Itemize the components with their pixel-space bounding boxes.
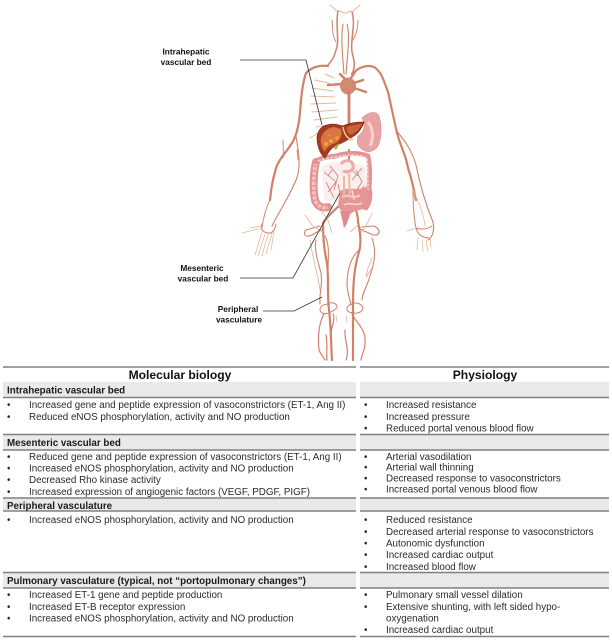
section: intrahepatic, physiology: •: [364, 400, 368, 411]
section: peripheral, physiology: •: [364, 550, 368, 561]
section: mesenteric, physiology: Arterial vasodilation: [386, 452, 472, 463]
section: peripheral, molecular biology: Increased eNOS phosphorylation, activity and NO production: [29, 515, 294, 526]
section: mesenteric, molecular biology: •: [7, 464, 11, 474]
label: mesenteric vascular bed: [178, 263, 228, 284]
section: peripheral, physiology: •: [364, 538, 368, 550]
label: peripheral vasculature: Peripheral: [218, 304, 258, 314]
section: peripheral, physiology: Decreased arterial response to vasoconstrictors: [386, 527, 594, 538]
section: pulmonary, physiology: •: [364, 602, 368, 613]
section: mesenteric, physiology: [364, 452, 561, 496]
section: mesenteric, physiology: •: [364, 452, 368, 463]
section: mesenteric, physiology: Increased portal venous blood flow: [386, 484, 538, 496]
section: mesenteric, molecular biology: •: [7, 475, 11, 486]
section: peripheral, physiology: Autonomic dysfunction: [386, 538, 485, 550]
vessels: left arm: [242, 66, 328, 256]
section: mesenteric, molecular biology: Increased expression of angiogenic factors (VEGF, PDGF, PIGF): [29, 487, 310, 498]
section: pulmonary, physiology: •: [364, 625, 368, 636]
section: pulmonary, molecular biology: •: [7, 602, 11, 613]
label: intrahepatic vascular bed: vascular bed: [161, 57, 211, 67]
column heading: physiology: Physiology: [453, 368, 518, 382]
section: peripheral, molecular biology: [7, 501, 294, 526]
section: pulmonary, physiology: Pulmonary small vessel dilation: [386, 590, 523, 601]
section: intrahepatic, molecular biology: Increased gene and peptide expression of vasoconstrictors (ET-1, Ang II): [29, 400, 345, 411]
label: peripheral vasculature: [216, 304, 262, 324]
section: intrahepatic, molecular biology: •: [7, 412, 11, 423]
section: peripheral, physiology: •: [364, 562, 368, 573]
table rules and section bands: [0, 366, 612, 640]
section: intrahepatic, molecular biology: Reduced eNOS phosphorylation, activity and NO production: [29, 412, 290, 423]
section: pulmonary, molecular biology: •: [7, 614, 11, 624]
section: intrahepatic, physiology: Increased resistance: [386, 400, 477, 411]
section: mesenteric, molecular biology: Increased eNOS phosphorylation, activity and NO production: [29, 464, 294, 474]
section: intrahepatic, physiology: Reduced portal venous blood flow: [386, 424, 535, 434]
organ: stomach: [357, 112, 381, 152]
section: intrahepatic, physiology: [364, 400, 535, 434]
section: intrahepatic, physiology: Increased pressure: [386, 412, 470, 423]
vessels: right arm: [352, 66, 434, 252]
section: peripheral, molecular biology: Peripheral vasculature: [7, 501, 113, 512]
section: intrahepatic, physiology: •: [364, 412, 368, 423]
section: pulmonary, physiology: oxygenation: [386, 614, 439, 624]
section: mesenteric, physiology: Decreased response to vasoconstrictors: [386, 474, 561, 484]
column heading: molecular biology: Molecular biology: [129, 368, 232, 382]
section: mesenteric, molecular biology: [7, 438, 342, 498]
section: peripheral, physiology: •: [364, 515, 368, 526]
section: peripheral, physiology: •: [364, 527, 368, 538]
section: pulmonary, molecular biology: •: [7, 590, 11, 601]
table: [0, 366, 612, 640]
label: mesenteric vascular bed: vascular bed: [178, 274, 228, 284]
section: mesenteric, physiology: •: [364, 474, 368, 484]
section: intrahepatic, molecular biology: [7, 386, 345, 423]
section: mesenteric, physiology: Arterial wall thinning: [386, 462, 474, 474]
section: peripheral, physiology: Increased blood flow: [386, 562, 477, 573]
section: pulmonary, molecular biology: Pulmonary vasculature (typical, not “portopulmonary changes”): [7, 576, 306, 587]
label: intrahepatic vascular bed: Intrahepatic: [162, 46, 210, 56]
vessels: heart and aorta: [328, 72, 366, 195]
leader line: mesenteric: [240, 193, 340, 278]
section: pulmonary, molecular biology: Increased eNOS phosphorylation, activity and NO production: [29, 614, 294, 624]
vessels: head and neck: [327, 5, 360, 74]
section: pulmonary, physiology: [364, 590, 560, 636]
label: peripheral vasculature: vasculature: [216, 314, 262, 324]
section: intrahepatic, molecular biology: Intrahepatic vascular bed: [7, 386, 125, 396]
section: peripheral, physiology: Reduced resistance: [386, 515, 473, 526]
section: mesenteric, molecular biology: •: [7, 452, 11, 463]
anatomical body illustration: [242, 5, 434, 360]
section: mesenteric, physiology: •: [364, 462, 368, 474]
section: pulmonary, molecular biology: [7, 576, 306, 624]
leader line: peripheral: [263, 297, 322, 311]
section: mesenteric, molecular biology: Mesenteric vascular bed: [7, 438, 121, 449]
section: mesenteric, physiology: •: [364, 484, 368, 496]
section: intrahepatic, molecular biology: •: [7, 400, 11, 411]
section: peripheral, molecular biology: •: [7, 515, 11, 526]
section: pulmonary, physiology: Extensive shunting, with left sided hypo-: [386, 602, 560, 613]
leader line: intrahepatic: [240, 60, 322, 125]
section: pulmonary, molecular biology: Increased ET-B receptor expression: [29, 602, 185, 613]
vessels: pelvis and legs: [304, 195, 379, 360]
vessels: ribs: [310, 74, 337, 138]
section: pulmonary, physiology: Increased cardiac output: [386, 625, 494, 636]
section: pulmonary, molecular biology: Increased ET-1 gene and peptide production: [29, 590, 222, 601]
section: pulmonary, physiology: •: [364, 590, 368, 601]
organ: small intestine and colon: [314, 153, 371, 228]
label: mesenteric vascular bed: Mesenteric: [180, 263, 224, 273]
section: mesenteric, molecular biology: Reduced gene and peptide expression of vasoconstrictors (ET-1, Ang II): [29, 452, 342, 463]
label: intrahepatic vascular bed: [161, 46, 211, 67]
section: peripheral, physiology: Increased cardiac output: [386, 550, 494, 561]
organ: liver: [317, 122, 364, 158]
section: intrahepatic, physiology: •: [364, 424, 368, 434]
section: mesenteric, molecular biology: •: [7, 487, 11, 498]
section: mesenteric, molecular biology: Decreased Rho kinase activity: [29, 475, 161, 486]
section: peripheral, physiology: [364, 515, 594, 573]
